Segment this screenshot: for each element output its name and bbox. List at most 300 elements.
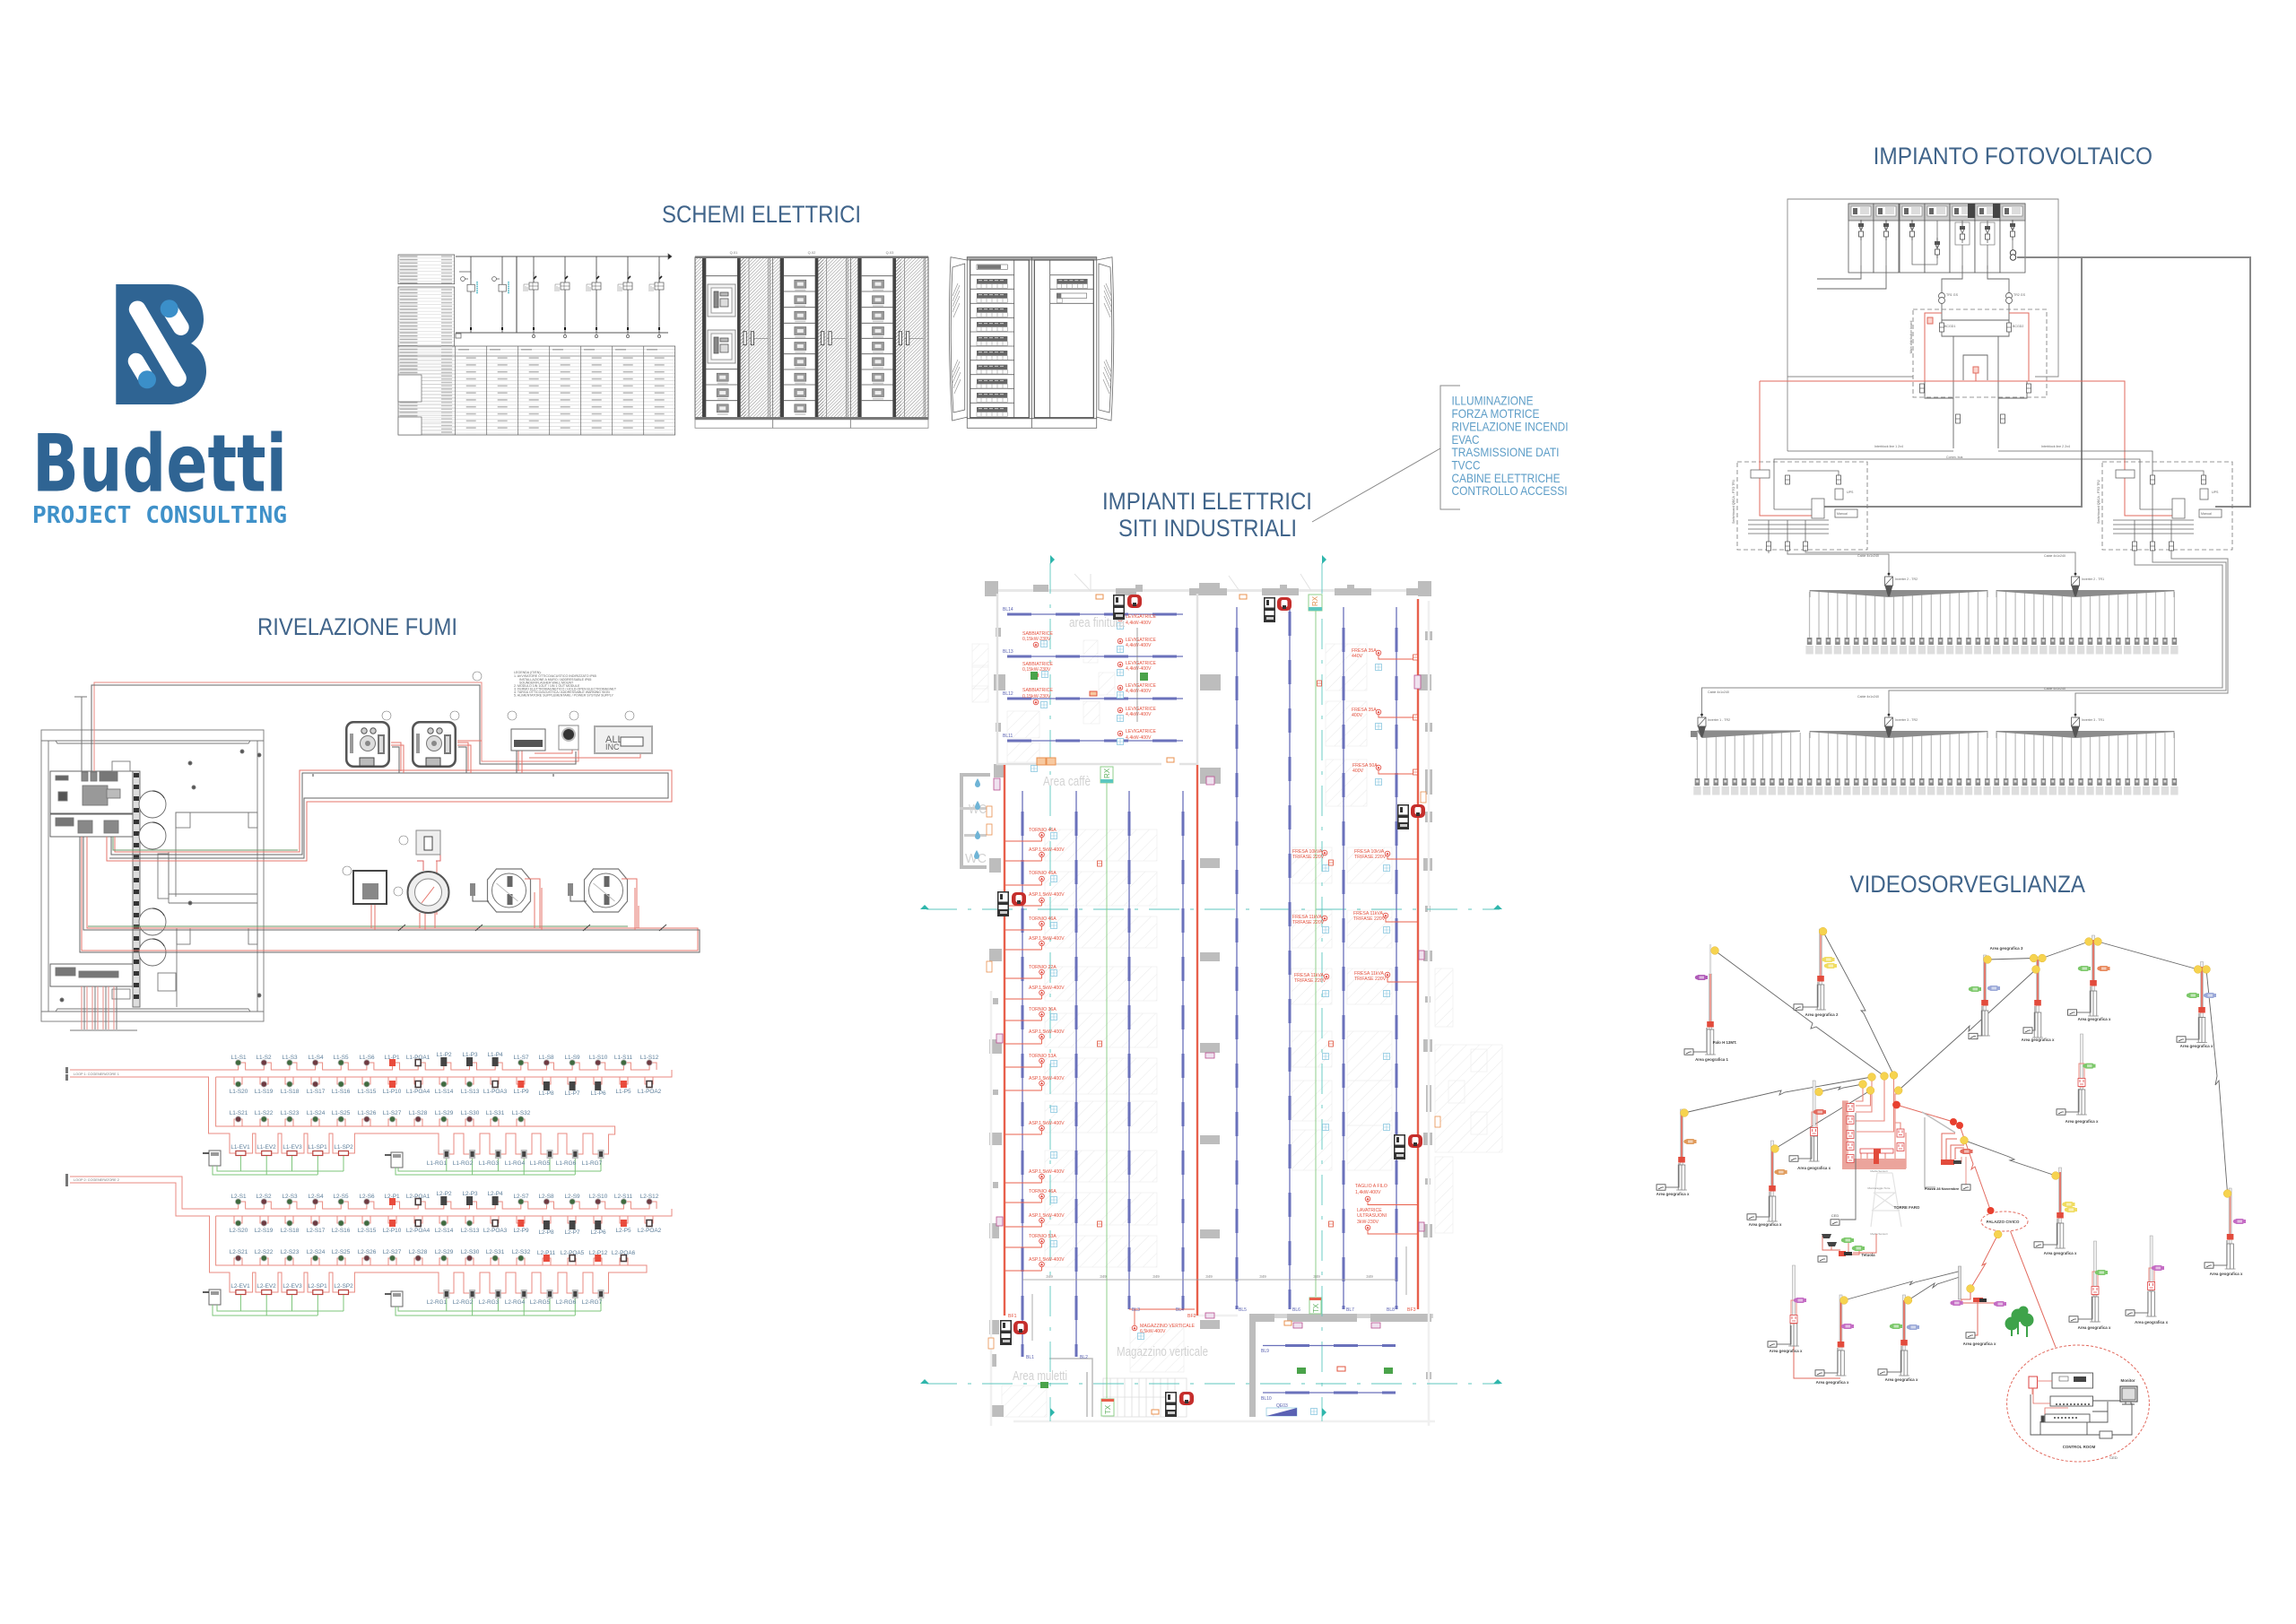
heading: impianto fotovoltaico: IMPIANTO FOTOVOLTAICO: [1874, 143, 2152, 169]
machine labels left: ASP.1,5kW-400V: [1029, 936, 1065, 942]
machine labels left: ASP.1,5kW-400V: [1029, 1169, 1065, 1175]
circuit names: BL4: [1176, 1307, 1184, 1313]
loop 1 labels: L1-S24: [307, 1110, 326, 1116]
tiny annotations: BCGD2: [2013, 325, 2023, 328]
main breakers: [708, 284, 735, 363]
dimension line: 349: [1152, 1274, 1160, 1279]
pole: area x near tower: Area geografica x: [1797, 1166, 1831, 1170]
tower structure: CED: [1831, 1213, 1839, 1218]
interior partitions: [991, 574, 1435, 1426]
loop 2 name: LOOP 2: COGENERATORE 2: [74, 1178, 119, 1182]
loop 2 labels: L2-POA5: [561, 1250, 585, 1256]
red power busbars: [1004, 599, 1418, 1316]
thick gray DC bus: [1817, 257, 2250, 507]
legend text: 2. MODULO 1IN 1OUT / 1IN 1 OUT MODULE: [514, 684, 580, 688]
TX RX units: [1100, 595, 1322, 1416]
outgoing breakers: [717, 280, 884, 415]
outer enclosure: [1787, 199, 2058, 451]
pole: area x far right: [2177, 961, 2216, 1048]
inverter string row 2: Inverter 3 - TR1: [2082, 718, 2104, 722]
panel: electrical single-line diagram and table: [398, 254, 675, 435]
loop 2 labels: L2-S13: [461, 1228, 480, 1234]
column tags: [730, 250, 894, 255]
pole: area x bottom centre: Area geografica x: [1885, 1377, 1918, 1382]
machine labels right: ULTRASUONI: [1357, 1213, 1387, 1219]
inverter string row 2: Cable 4x1x240: [1708, 690, 1729, 694]
machine labels top room: 4,4kW-400V: [1126, 735, 1152, 741]
column tags: Q.02: [808, 250, 816, 255]
loop 2 labels: L2-S18: [281, 1228, 300, 1234]
device: sounders and signal: [345, 721, 652, 768]
machine labels top room: [1022, 614, 1156, 741]
room names: Area muletti: [1013, 1368, 1067, 1384]
axis markers: [920, 555, 1502, 1417]
text block: list of systems: RIVELAZIONE INCENDI: [1451, 420, 1568, 434]
label columns: [398, 255, 455, 346]
loop 1 labels: L1-S11: [614, 1055, 633, 1061]
dimension line: 349: [1100, 1274, 1107, 1279]
tower structure: [1831, 1113, 1920, 1236]
room names: Magazzino verticale: [1117, 1344, 1208, 1359]
loop 1 labels: L1-POA4: [406, 1089, 430, 1095]
circuit names: BF3: [1407, 1307, 1416, 1313]
loop 2 labels: L2-S21: [230, 1249, 248, 1255]
circuit names: BL11: [1003, 734, 1013, 739]
circuit names: BL13: [1003, 649, 1013, 655]
inverter string row 1: Cable 4x1x240: [1857, 554, 1879, 558]
pole: area x bottom centre left: [1815, 1295, 1854, 1385]
loop 2 devices: [203, 1196, 652, 1307]
inverter string row 2: Cable 4x1x240: [1857, 695, 1879, 699]
inverter string row 2: [1691, 687, 2179, 796]
panel: loop 1 wiring: [65, 1052, 672, 1175]
text block: list of systems: TRASMISSIONE DATI: [1451, 445, 1559, 459]
logo: Budetti Project Consulting: [32, 284, 287, 529]
inverter string row 2: Inverter 1 - TR2: [1708, 718, 1730, 722]
loop 2 labels: L2-RG7: [582, 1299, 603, 1306]
callouts: [343, 672, 634, 896]
loop 1 labels: L1-S4: [308, 1055, 324, 1061]
loop 1 labels: L1-S8: [538, 1055, 554, 1061]
loop 2 labels: L2-EV2: [257, 1283, 276, 1290]
machine labels top room: LEVIGATRICE: [1126, 614, 1156, 620]
loop 2 labels: L2-S16: [332, 1228, 351, 1234]
loop 1 labels: L1-RG3: [479, 1160, 500, 1167]
device: sounders and signal: INC: [605, 743, 620, 751]
loop 1 labels: L1-EV1: [230, 1144, 250, 1151]
machine labels right: 3kW-230V: [1357, 1220, 1379, 1225]
loop 1 labels: L1-S13: [461, 1089, 480, 1095]
machine labels right: 440V: [1352, 654, 1363, 659]
machine labels top room: SABBIATRICE: [1022, 631, 1053, 637]
circuit names: BL7: [1346, 1307, 1354, 1313]
board frame: [695, 256, 928, 428]
loop 2 labels: L2-P6: [590, 1229, 606, 1236]
loop 2 labels: L2-S24: [307, 1249, 326, 1255]
text block: list of systems: CABINE ELETTRICHE: [1451, 471, 1561, 485]
inverter string row 1: [1805, 554, 2179, 656]
loop 1 labels: L1-S2: [256, 1055, 272, 1061]
machine labels right: FRESA 35A: [1352, 708, 1377, 713]
machine labels right: 6,5kW-400V: [1140, 1329, 1166, 1334]
machine labels right: TRIFASE 220V: [1292, 855, 1325, 860]
dimension line: 349: [1205, 1274, 1213, 1279]
MV switchgear: [1848, 204, 2025, 273]
loop 1 labels: L1-S19: [255, 1089, 274, 1095]
tiny annotations: TR1 GS: [1946, 293, 1959, 297]
red branch circuits: [1004, 653, 1418, 1328]
machine labels left: ASP.1,5kW-400V: [1029, 847, 1065, 853]
loop 1 name: LOOP 1: COGENERATORE 1: [74, 1073, 119, 1076]
pole: area 1: [1684, 944, 1736, 1062]
loop 1 labels: L1-P1: [384, 1055, 400, 1061]
pole: area x top centre: Area geografica x: [2022, 1038, 2055, 1042]
loop 2 labels: L2-S19: [255, 1228, 274, 1234]
loop 1 labels: L1-S10: [589, 1055, 608, 1061]
pole: area x top right: Area geografica x: [2078, 1017, 2111, 1021]
machine labels right: LAVATRICE: [1357, 1208, 1382, 1213]
room names: Area caffè: [1043, 774, 1091, 789]
loop 2 labels: L2-S17: [307, 1228, 326, 1234]
red safety wiring: [1760, 313, 2174, 516]
loop 2 labels: L2-RG5: [530, 1299, 551, 1306]
panel: loop 2 wiring: [65, 1174, 672, 1316]
machine labels right: [1140, 648, 1387, 1334]
loop 2 labels: L2-S25: [332, 1249, 351, 1255]
machine labels left: ASP.1,5kW-400V: [1029, 1121, 1065, 1126]
circuit names: BL8: [1387, 1307, 1395, 1313]
pole: area x lower right: [2205, 1188, 2246, 1276]
pole: area x top centre: [2022, 954, 2055, 1042]
pole: area x lower centre right: Area geografica x: [2135, 1320, 2169, 1324]
tiny annotations: UPS: [2212, 491, 2219, 494]
machine labels top room: SABBIATRICE: [1022, 662, 1053, 667]
loop 1 labels: L1-P6: [590, 1090, 606, 1097]
loop 1 terminals: [65, 1067, 68, 1081]
tower structure: Media Sensori: [1870, 1169, 1888, 1173]
loop 1 labels: L1-S27: [383, 1110, 402, 1116]
loop 1 labels: L1-P4: [487, 1052, 503, 1058]
blue light thick segments: [1007, 612, 1396, 1393]
pole: area 1: Palo H 13MT.: [1713, 1040, 1736, 1045]
panel: industrial site floor plan: [920, 555, 1502, 1426]
fibre links: [1794, 1105, 2056, 1378]
loop 2 labels: L2-P12: [589, 1250, 608, 1256]
loop 2 labels: L2-S32: [512, 1249, 531, 1255]
pole: area x lower centre right: [2126, 1236, 2169, 1324]
machine labels left: TORNIO 46A: [1029, 828, 1057, 833]
loop 2 labels: L2-S20: [230, 1228, 248, 1234]
TX RX units: RX: [1311, 595, 1319, 606]
heading: impianti elettrici siti industriali: IMPIANTI ELETTRICI: [1102, 488, 1312, 515]
heading: schemi elettrici: SCHEMI ELETTRICI: [662, 201, 861, 228]
pole: area x right of palazzo: [2034, 1168, 2077, 1255]
machine labels top room: LEVIGATRICE: [1126, 661, 1156, 666]
busbars and feeders: [456, 254, 672, 338]
circuit names: BF2: [1187, 1314, 1196, 1319]
loop 2 labels: L2-POA6: [612, 1250, 636, 1256]
stairs: [1103, 1378, 1187, 1417]
machine labels right: FRESA 11kVA: [1354, 971, 1385, 977]
dimension line: 349: [1313, 1274, 1320, 1279]
tiny annotations: UPS: [1847, 491, 1854, 494]
legend text: 1. AVVISATORE OTTICO/ACUSTICO INDIRIZZATO IP65: [514, 674, 596, 678]
loop 1 labels: L1-S18: [281, 1089, 300, 1095]
circuit names: BL12: [1003, 691, 1013, 697]
circuit names: BL6: [1292, 1307, 1300, 1313]
loop 1 devices: [203, 1057, 652, 1168]
machine labels right: TAGLIO A FILO: [1355, 1184, 1387, 1189]
loop 2 labels: L2-SP1: [308, 1283, 327, 1290]
loop 2 labels: L2-S30: [461, 1249, 480, 1255]
machine labels left: ASP.1,5kW-400V: [1029, 1213, 1065, 1219]
loop 1 labels: L1-S16: [332, 1089, 351, 1095]
room names: area finitura: [1069, 615, 1126, 630]
loop 2 labels: L2-S12: [640, 1194, 659, 1200]
text block: list of systems: CONTROLLO ACCESSI: [1451, 483, 1568, 498]
fire panels and hydrants: [997, 595, 1425, 1417]
loop 1 labels: L1-S28: [409, 1110, 428, 1116]
loop 2 labels: L2-SP2: [334, 1283, 353, 1290]
machine labels right: TRIFASE 220V: [1294, 978, 1326, 984]
loop 2 labels: L2-S28: [409, 1249, 428, 1255]
QE03 board: QE03: [1276, 1403, 1288, 1409]
loop 2 labels: L2-S1: [230, 1194, 247, 1200]
compartment dividers: [706, 276, 893, 401]
machine labels right: FRESA 11kVA: [1292, 915, 1323, 920]
loop 1 labels: L1-S14: [435, 1089, 454, 1095]
green emergency boxes: [1031, 672, 1393, 1388]
board internals: [1748, 451, 2222, 565]
loop 1 labels: L1-SP1: [308, 1144, 327, 1151]
circuit names: BL1: [1026, 1355, 1034, 1360]
machine labels top room: SABBIATRICE: [1022, 688, 1053, 693]
loop 2 labels: L2-S31: [486, 1249, 505, 1255]
callout: bracket and leader line: [1312, 386, 1460, 522]
control room: Monitor: [2121, 1378, 2135, 1383]
loop 1 wires: [70, 1063, 672, 1154]
machine labels top room: 0,15kW-230V: [1022, 637, 1051, 642]
text block: list of systems: FORZA MOTRICE: [1451, 406, 1539, 421]
loop 1 labels: L1-RG5: [530, 1160, 551, 1167]
machine labels right: FRESA 10kVA: [1354, 849, 1385, 855]
machine labels right: FRESA 50A: [1352, 763, 1378, 769]
room names: [965, 615, 1208, 1384]
pole: area 2: Area geografica 2: [1805, 1012, 1839, 1017]
machine labels left: ASP.1,5kW-400V: [1029, 892, 1065, 898]
loop 1 labels: L1-S21: [230, 1110, 248, 1116]
text block: list of systems: ILLUMINAZIONE: [1451, 393, 1534, 407]
circuit names: BL3: [1132, 1307, 1140, 1313]
tiny annotations: Switchboard QBCA - PTO TR2: [2097, 480, 2100, 524]
loop 2 labels: L2-P11: [537, 1250, 556, 1256]
axis grid: [926, 563, 1500, 1421]
pole: area x lower right: Area geografica x: [2210, 1272, 2243, 1276]
loop 1 labels: L1-S26: [358, 1110, 377, 1116]
dashed distribution boards: [1737, 309, 2232, 550]
pole: area 3: Area geografica 3: [1990, 946, 2023, 951]
heading: rivelazione fumi: RIVELAZIONE FUMI: [257, 613, 457, 640]
pole: area x lower centre: Area geografica x: [2078, 1325, 2111, 1330]
column tags: Q.01: [730, 250, 738, 255]
machine labels top room: 0,15kW-230V: [1022, 667, 1051, 673]
pole: area x left: [1747, 1141, 1787, 1227]
loop 2 labels: L2-S5: [333, 1194, 349, 1200]
machine labels top room: 4,4kW-400V: [1126, 643, 1152, 648]
tiny annotations: Comm. bus: [1946, 456, 1963, 459]
tower structure: Monitoraggio Torre: [1868, 1186, 1891, 1190]
loop 2 labels: L2-S7: [513, 1194, 529, 1200]
loop 2 labels: L2-RG4: [505, 1299, 526, 1306]
panel: switchboard front view: [695, 250, 928, 428]
loop 1 labels: L1-P10: [383, 1089, 402, 1095]
wordmark: Budetti: [32, 417, 287, 509]
loop 1 labels: L1-RG1: [427, 1160, 448, 1167]
Palazzo Civico node: PALAZZO CIVICO: [1987, 1220, 2020, 1224]
icon: B monogram: [116, 284, 206, 404]
device: sounders and signal: ALL: [605, 734, 623, 745]
tiny annotations: Manual: [2201, 512, 2212, 516]
machine labels left: TORNIO 46A: [1029, 916, 1057, 922]
text block: list of systems: EVAC: [1451, 432, 1480, 447]
loop 2 labels: L2-S4: [308, 1194, 324, 1200]
loop 1 labels: L1-S22: [255, 1110, 274, 1116]
legend text: SOUNDER/FLASHER WALL MOUNT: [519, 682, 574, 685]
loop 2 terminals: [65, 1174, 68, 1186]
inverter string row 2: Cable 4x1x240: [2044, 687, 2066, 690]
control room: CONTROL ROOM: [2063, 1445, 2096, 1449]
Piazza 28 Novembre site: Piazza 28 Novembre: [1925, 1186, 1960, 1191]
loop 2 labels: L2-POA4: [406, 1228, 430, 1234]
loop 2 labels: L2-S23: [281, 1249, 300, 1255]
machine labels left: [1029, 828, 1065, 1263]
loop 2 labels: L2-RG2: [453, 1299, 474, 1306]
machine labels left: TORNIO 46A: [1029, 1189, 1057, 1194]
pole: relay site with trees side: Area geografica x: [1963, 1342, 1996, 1346]
pole: area x bottom centre: [1878, 1295, 1919, 1382]
loop 2 green supply: [213, 1295, 601, 1316]
circuit names: BL2: [1080, 1355, 1088, 1360]
loop 2 labels: L2-P8: [538, 1229, 554, 1236]
tower base cameras: [1818, 1234, 1876, 1262]
text block: list of systems: [1451, 393, 1568, 498]
green TX/RX cables: [1107, 611, 1316, 1398]
machine labels right: TRIFASE 220V: [1354, 977, 1387, 982]
tower structure: Media Sensori: [1870, 1232, 1888, 1236]
room names: WC: [965, 851, 987, 866]
loop 2 labels: L2-P9: [513, 1228, 529, 1234]
machine labels right: 1,4kW-400V: [1355, 1190, 1381, 1195]
TX RX units: TX: [1104, 1404, 1112, 1414]
inverter string row 1: Cable 4x1x240: [2044, 554, 2066, 558]
loop 2 labels: L2-S8: [538, 1194, 554, 1200]
QE03 board: [1266, 1403, 1297, 1416]
dimension line: 349: [1046, 1274, 1053, 1279]
loop 1 labels: L1-P7: [564, 1090, 580, 1097]
machine labels top room: LEVIGATRICE: [1126, 707, 1156, 712]
machine labels left: ASP.1,5kW-400V: [1029, 1076, 1065, 1081]
loop 1 labels: L1-EV3: [283, 1144, 302, 1151]
loop 2 labels: L2-S22: [255, 1249, 274, 1255]
loop 1 labels: L1-POA1: [406, 1055, 430, 1061]
pole: area x right of palazzo: Area geografica x: [2044, 1251, 2077, 1255]
loop 1 labels: L1-P9: [513, 1089, 529, 1095]
loop 1 labels: L1-S9: [564, 1055, 580, 1061]
loop 2 labels: L2-POA2: [638, 1228, 662, 1234]
loop 2 labels: L2-EV1: [230, 1283, 250, 1290]
circuit names: BL5: [1239, 1307, 1247, 1313]
loop 2 labels: L2-EV3: [283, 1283, 302, 1290]
tiny annotations: [1732, 293, 2219, 524]
socket markers: [1031, 622, 1390, 1415]
panel: photovoltaic single-line diagram: [1691, 199, 2250, 796]
doors: [949, 257, 1114, 421]
machine labels right: FRESA 11kVA: [1294, 973, 1325, 978]
machine labels left: TORNIO 36A: [1029, 1007, 1057, 1012]
machine labels left: ASP.1,5kW-400V: [1029, 986, 1065, 991]
pole: area x far left: Area geografica x: [1657, 1192, 1690, 1196]
blue light rails: [1007, 607, 1396, 1393]
loop 1 labels: L1-S5: [333, 1055, 349, 1061]
loop 2 labels: L2-P5: [615, 1228, 631, 1234]
inverter string row 1: Inverter 2 - TR2: [1895, 578, 1918, 581]
loop 1 labels: L1-EV2: [257, 1144, 276, 1151]
tiny annotations: BCGD1: [1944, 325, 1955, 328]
loop 2 labels: L2-P2: [436, 1191, 452, 1197]
tower hub: [1842, 1072, 1906, 1169]
loop 2 labels: L2-S10: [589, 1194, 608, 1200]
loop 1 labels: L1-S32: [512, 1110, 531, 1116]
loop 2 labels: L2-RG1: [427, 1299, 448, 1306]
loop 1 labels: L1-S30: [461, 1110, 480, 1116]
tiny annotations: Switchboard QBCA - PTO TR1: [1732, 480, 1735, 524]
machine labels right: TRIFASE 220V: [1353, 916, 1386, 922]
loop 1 labels: L1-RG7: [582, 1160, 603, 1167]
machine labels right: TRIFASE 220V: [1354, 855, 1387, 860]
machine labels top room: LEVIGATRICE: [1126, 683, 1156, 689]
feeders and transformers: [1817, 265, 2027, 448]
loop 2 labels: L2-P1: [384, 1194, 400, 1200]
column tags: Q.03: [886, 250, 894, 255]
loop 1 labels: L1-S17: [307, 1089, 326, 1095]
loop 2 labels: L2-S6: [359, 1194, 375, 1200]
loop 2 wires: [70, 1177, 672, 1293]
machine labels top room: 4,4kW-400V: [1126, 621, 1152, 626]
loop 2 labels: L2-S15: [358, 1228, 377, 1234]
loop 1 labels: L1-S6: [359, 1055, 375, 1061]
inverter string row 1: Inverter 2 - TR1: [2082, 578, 2104, 581]
machine labels left: TORNIO 22A: [1029, 965, 1057, 970]
pole: area x left: Area geografica x: [1749, 1222, 1782, 1227]
loop 1 labels: L1-RG6: [556, 1160, 577, 1167]
pole: area x lower centre: [2069, 1241, 2111, 1330]
machine labels right: FRESA 10kVA: [1292, 849, 1323, 855]
loop 1 labels: [230, 1052, 662, 1167]
cabinet body: [967, 257, 1097, 428]
loop 1 labels: L1-S12: [640, 1055, 659, 1061]
inverter string row 2: Inverter 3 - TR2: [1895, 718, 1918, 722]
legend text: 5. ALIMENTATORE SUPPLEMENTARE / POWER SYSTEM SUPPLY: [514, 694, 613, 698]
loop 2 labels: L2-RG6: [556, 1299, 577, 1306]
loop 2 labels: L2-S26: [358, 1249, 377, 1255]
radio links: [1684, 932, 2228, 1300]
machine labels right: 400V: [1352, 769, 1364, 774]
tiny annotations: Manual: [1837, 512, 1848, 516]
control cabinet: [41, 730, 264, 1021]
machine labels top room: LEVIGATRICE: [1126, 729, 1156, 734]
circuit names: BL9: [1261, 1349, 1269, 1354]
machine labels right: TRIFASE 220V: [1292, 920, 1325, 925]
